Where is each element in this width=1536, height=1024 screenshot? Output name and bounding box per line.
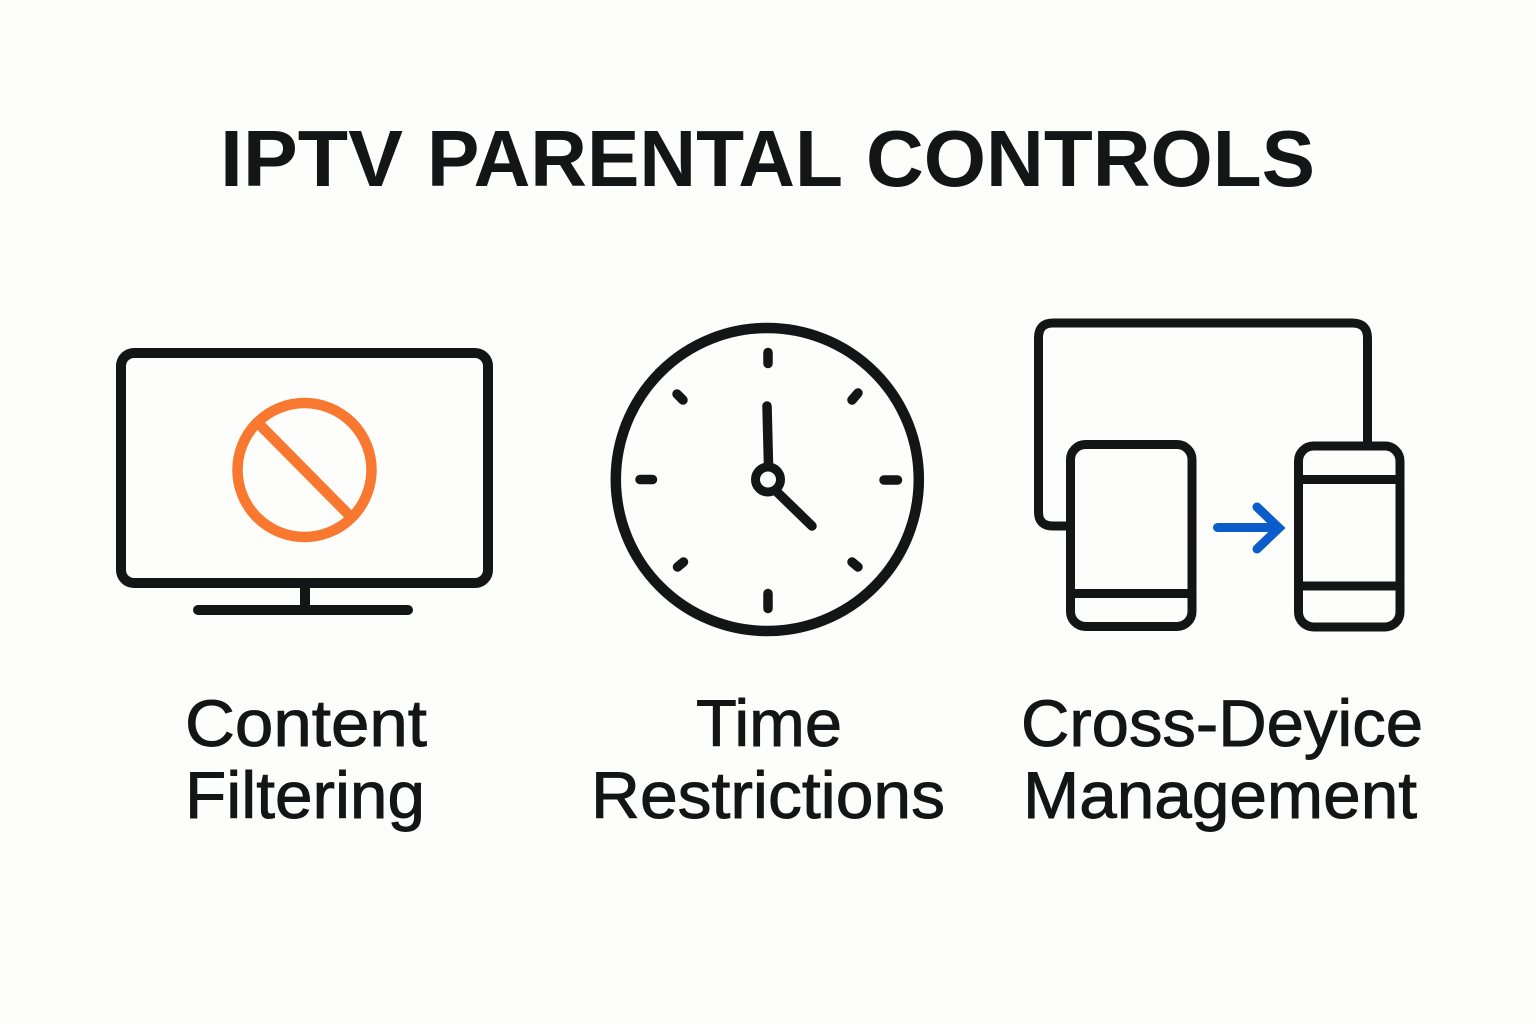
phone — [1298, 446, 1400, 627]
label: content filtering: Filtering — [185, 758, 425, 832]
label: cross-device management: Management — [1023, 758, 1417, 832]
prohibition sign — [238, 403, 372, 537]
clock ticks — [640, 352, 898, 608]
tablet — [1070, 444, 1192, 626]
label: time restrictions: Time — [696, 686, 842, 760]
clock pivot — [756, 467, 780, 492]
icon: devices — [1038, 323, 1400, 627]
tv screen — [121, 353, 488, 583]
icon: clock — [616, 328, 919, 631]
large screen outline — [1038, 323, 1368, 526]
label: cross-device management — [1021, 686, 1423, 832]
label: cross-device management: Cross-Deyice — [1021, 686, 1423, 760]
label: time restrictions — [591, 686, 945, 832]
label: content filtering: Content — [185, 686, 427, 760]
clock face — [616, 328, 919, 631]
clock hands — [767, 406, 812, 526]
title: PARENTAL — [427, 114, 843, 203]
tv stand — [198, 584, 408, 610]
label: content filtering — [185, 686, 427, 832]
label: time restrictions: Restrictions — [591, 758, 945, 832]
title — [220, 114, 1315, 203]
title: CONTROLS — [866, 114, 1315, 203]
arrow — [1218, 507, 1279, 549]
icon: tv with blocked symbol — [121, 353, 488, 610]
title: IPTV — [220, 114, 403, 203]
